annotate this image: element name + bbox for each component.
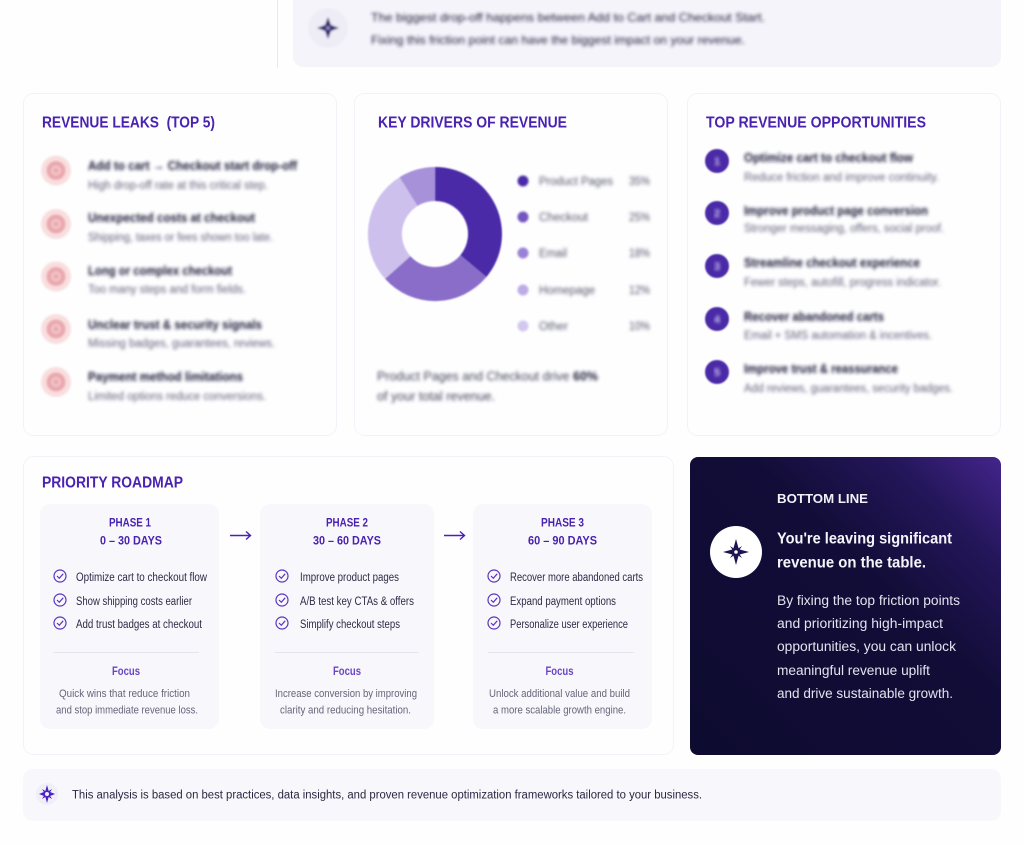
phase 1 checklist: Show shipping costs earlier xyxy=(76,596,192,608)
phase 2 heading: 30 – 60 DAYS xyxy=(313,534,381,548)
legend labels and values: Homepage xyxy=(539,285,595,297)
arrow: phase 2 to phase 3 xyxy=(444,532,464,540)
phase 3 heading xyxy=(528,516,597,548)
phase 3 checklist: Expand payment options xyxy=(510,596,616,608)
badge numbers: 5 xyxy=(714,367,720,379)
legend labels and values: 12% xyxy=(629,285,650,297)
phase 2 checklist: Simplify checkout steps xyxy=(300,619,400,631)
phase 1 checklist: Optimize cart to checkout flow xyxy=(76,572,208,584)
leak list text: Unexpected costs at checkout xyxy=(88,211,256,225)
opportunity list text: Streamline checkout experience xyxy=(744,256,920,270)
bottom line body: and prioritizing high-impact xyxy=(777,616,943,631)
phase 3 heading: PHASE 3 xyxy=(541,516,584,530)
phase 1 heading: 0 – 30 DAYS xyxy=(100,534,162,548)
leak list text: High drop-off rate at this critical step. xyxy=(88,180,268,192)
phase 2 focus: clarity and reducing hesitation. xyxy=(280,704,411,716)
donut chart xyxy=(368,167,502,301)
leak list text: Add to cart → Checkout start drop-off xyxy=(88,159,298,173)
opportunity list text: Stronger messaging, offers, social proof. xyxy=(744,223,944,235)
phase 2 card xyxy=(260,504,434,729)
opportunity list text: Email + SMS automation & incentives. xyxy=(744,330,932,342)
panel: revenue leaks xyxy=(24,94,336,436)
phase 2 focus: Focus xyxy=(333,666,361,678)
numbered badges xyxy=(705,149,729,384)
bottom line body: and drive sustainable growth. xyxy=(777,686,953,701)
phase 2 checklist: Improve product pages xyxy=(300,572,399,584)
panel: key insight callout xyxy=(293,0,1001,67)
panel: bottom line xyxy=(690,457,1001,755)
phase 1 checklist xyxy=(54,570,208,631)
panel: footer note xyxy=(23,769,1001,821)
badge numbers: 2 xyxy=(714,208,720,220)
bottom line headline xyxy=(777,530,953,572)
legend markers xyxy=(518,176,528,332)
bottom line body: By fixing the top friction points xyxy=(777,593,960,608)
chart legend xyxy=(518,176,650,333)
badge numbers: 4 xyxy=(714,314,721,326)
phase 3 focus: Focus xyxy=(546,666,574,678)
bottom line headline: You're leaving significant xyxy=(777,530,953,548)
legend labels and values: Other xyxy=(539,321,568,333)
phase 2 checklist xyxy=(276,570,414,631)
opportunity list text: Optimize cart to checkout flow xyxy=(744,151,913,165)
icon: insight star xyxy=(308,8,348,48)
bottom line label: BOTTOM LINE xyxy=(777,491,868,506)
icons: leak targets xyxy=(41,156,71,397)
phase 2 checklist: A/B test key CTAs & offers xyxy=(300,596,414,608)
leak list text: Payment method limitations xyxy=(88,370,243,384)
phase 3 card xyxy=(473,504,652,729)
bottom line body: meaningful revenue uplift xyxy=(777,663,930,678)
phase 1 focus: and stop immediate revenue loss. xyxy=(56,704,198,716)
vertical divider xyxy=(277,0,278,68)
phase 1 card xyxy=(40,504,219,729)
phase 3 checklist: Recover more abandoned carts xyxy=(510,572,643,584)
phase 1 checklist: Add trust badges at checkout xyxy=(76,619,203,631)
chart takeaway note xyxy=(377,370,598,404)
legend labels and values: Email xyxy=(539,248,567,260)
opportunity list text: Add reviews, guarantees, security badges. xyxy=(744,383,953,395)
phase 1 heading xyxy=(100,516,162,548)
phase 2 focus: Increase conversion by improving xyxy=(275,688,417,700)
insight text: The biggest drop-off happens between Add to Cart and Checkout Start. xyxy=(371,10,765,24)
icon: footer star xyxy=(36,783,58,805)
opportunity list text: Improve trust & reassurance xyxy=(744,362,898,376)
opportunity list text: Fewer steps, autofill, progress indicator. xyxy=(744,277,941,289)
insight text xyxy=(371,10,765,47)
legend labels and values: 18% xyxy=(629,248,650,260)
insight text: Fixing this friction point can have the biggest impact on your revenue. xyxy=(371,33,745,47)
icon: white circle with star xyxy=(710,526,762,578)
legend labels and values: Checkout xyxy=(539,212,589,224)
leak list text: Shipping, taxes or fees shown too late. xyxy=(88,232,273,244)
bottom line body xyxy=(777,593,960,701)
chart takeaway note: Product Pages and Checkout drive 60% xyxy=(377,370,598,384)
phase 3 checklist: Personalize user experience xyxy=(510,619,628,631)
phase 2 heading xyxy=(313,516,381,548)
heading: revenue leaks: REVENUE LEAKS (TOP 5) xyxy=(42,114,215,132)
leak list text: Long or complex checkout xyxy=(88,264,233,278)
phase 2 heading: PHASE 2 xyxy=(326,516,368,530)
phase 3 heading: 60 – 90 DAYS xyxy=(528,534,597,548)
opportunity list text xyxy=(744,151,953,395)
bottom line body: opportunities, you can unlock xyxy=(777,639,956,654)
leak list text: Unclear trust & security signals xyxy=(88,318,262,332)
badge numbers xyxy=(714,156,721,379)
leak list text xyxy=(88,159,298,403)
legend labels and values: 10% xyxy=(629,321,650,333)
opportunity list text: Recover abandoned carts xyxy=(744,310,884,324)
phase 3 focus: a more scalable growth engine. xyxy=(493,704,626,716)
heading: top opportunities: TOP REVENUE OPPORTUNITIES xyxy=(706,114,926,132)
phase 3 checklist xyxy=(488,570,643,631)
arrow: phase 1 to phase 2 xyxy=(230,532,250,540)
heading: key drivers: KEY DRIVERS OF REVENUE xyxy=(378,114,567,132)
badge numbers: 3 xyxy=(714,261,720,273)
leak list text: Too many steps and form fields. xyxy=(88,284,246,296)
bottom line headline: revenue on the table. xyxy=(777,554,926,572)
phase 1 focus: Quick wins that reduce friction xyxy=(59,688,190,700)
phase 1 focus: Focus xyxy=(112,666,140,678)
heading: priority roadmap: PRIORITY ROADMAP xyxy=(42,474,183,492)
legend labels and values xyxy=(539,176,650,333)
legend labels and values: 35% xyxy=(629,176,650,188)
panel: key drivers of revenue xyxy=(354,94,668,436)
phase 3 focus: Unlock additional value and build xyxy=(489,688,630,700)
footer text: This analysis is based on best practices, data insights, and proven revenue optimization frameworks tailored to your business. xyxy=(72,790,702,802)
phase 1 focus xyxy=(56,666,198,716)
phase 2 focus xyxy=(275,666,417,716)
chart takeaway note: of your total revenue. xyxy=(377,390,495,404)
legend labels and values: 25% xyxy=(629,212,650,224)
opportunity list text: Reduce friction and improve continuity. xyxy=(744,172,939,184)
badge numbers: 1 xyxy=(714,156,720,168)
opportunity list text: Improve product page conversion xyxy=(744,204,928,218)
panel: priority roadmap xyxy=(24,456,674,754)
leak list text: Missing badges, guarantees, reviews. xyxy=(88,338,275,350)
legend labels and values: Product Pages xyxy=(539,176,613,188)
leak list text: Limited options reduce conversions. xyxy=(88,391,266,403)
phase 1 heading: PHASE 1 xyxy=(109,516,151,530)
phase 3 focus xyxy=(489,666,630,716)
panel: top revenue opportunities xyxy=(688,94,1000,436)
